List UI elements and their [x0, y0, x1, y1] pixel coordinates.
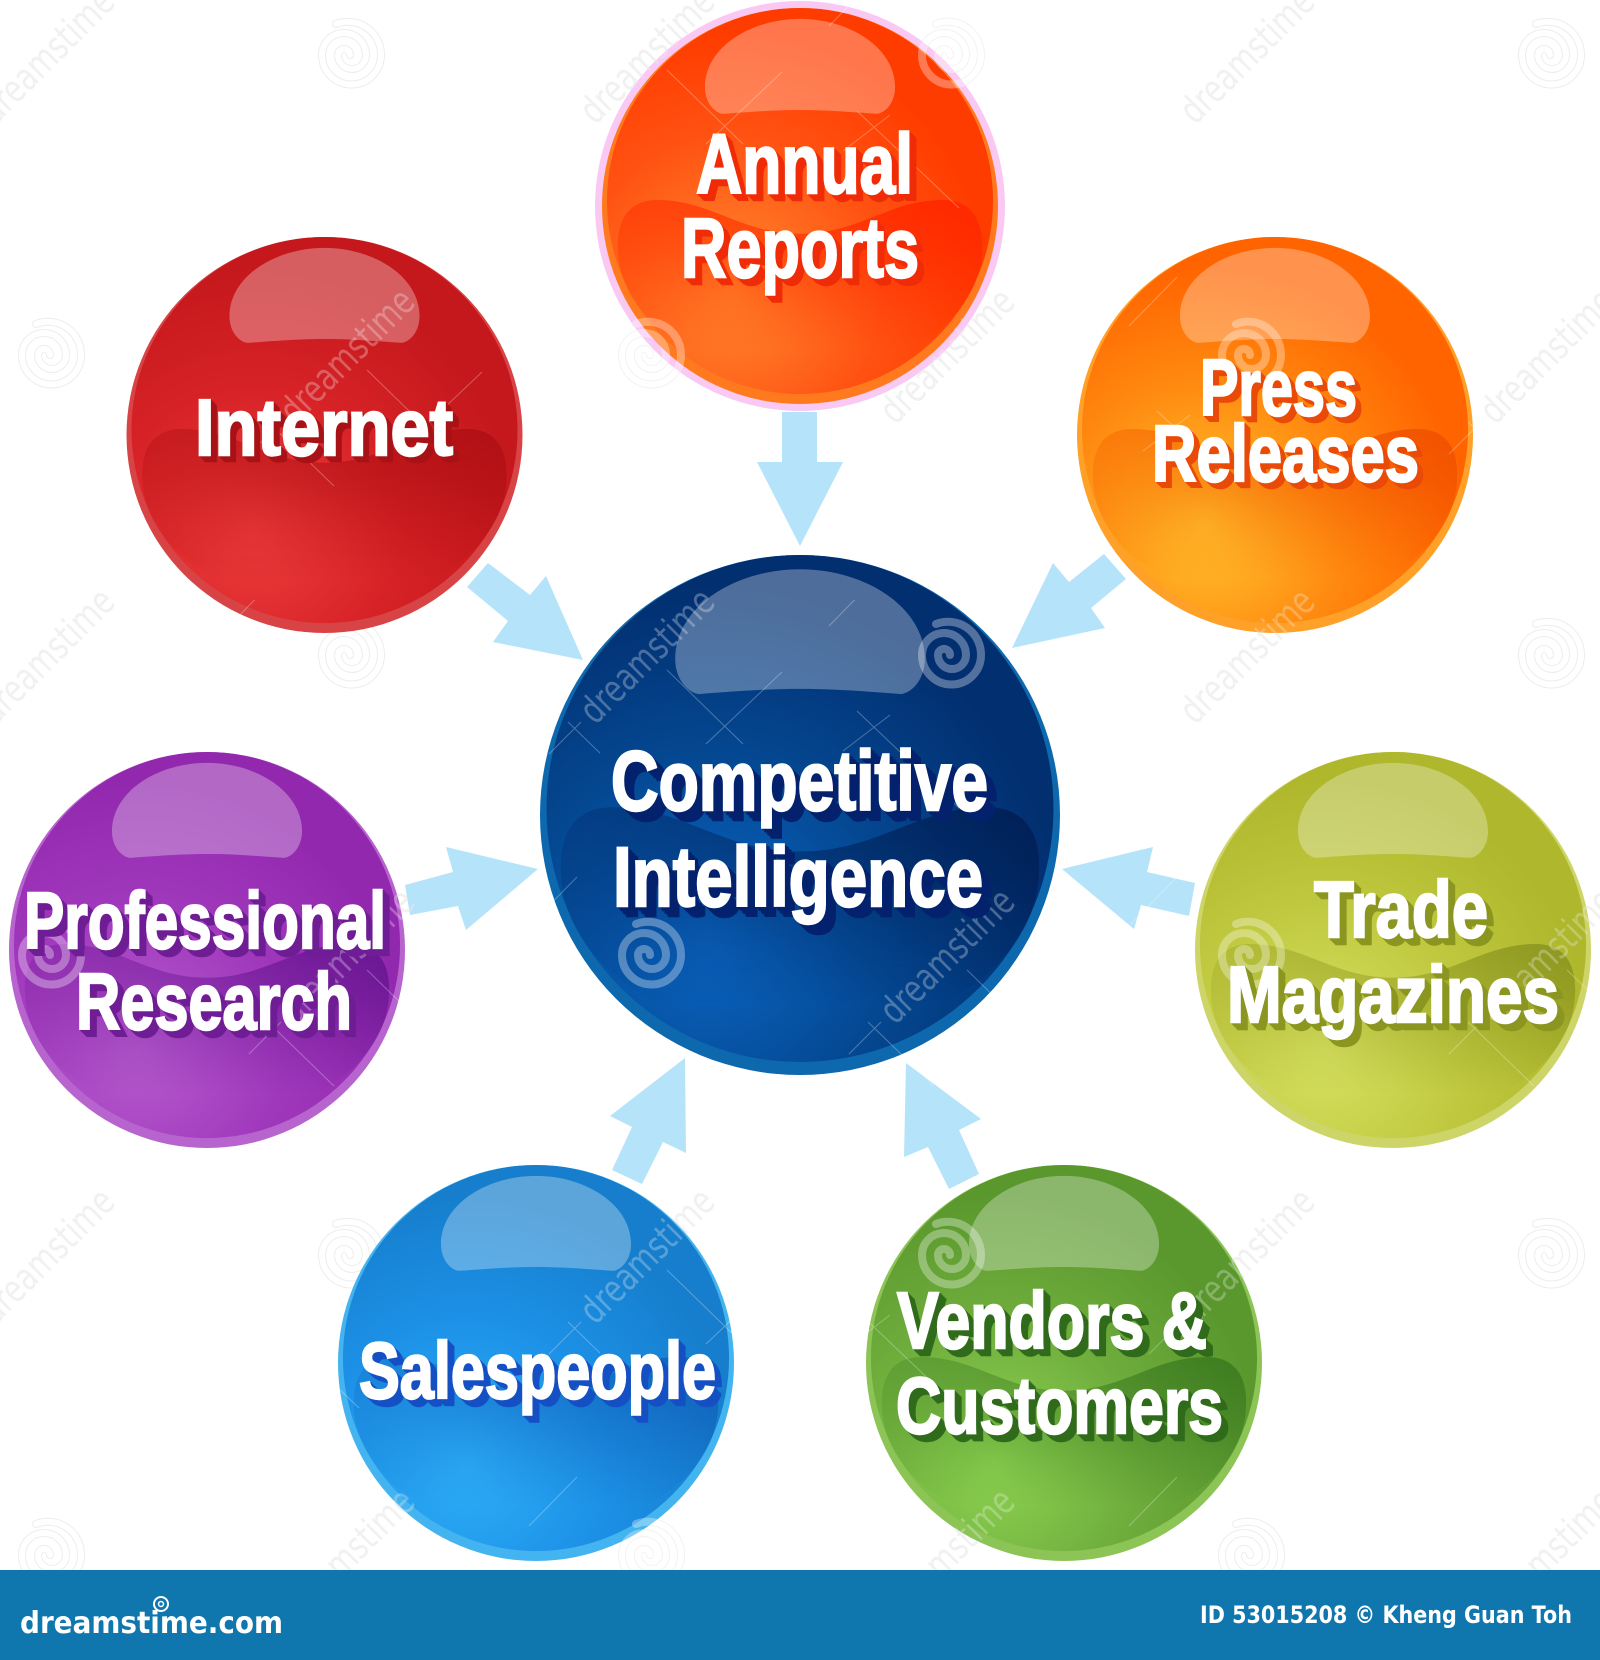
circle: press releases — [1077, 237, 1473, 633]
watermark spirals over circles — [22, 22, 1281, 1584]
label: Professional Research: Research — [76, 957, 352, 1046]
label: Competitive Intelligence — [611, 734, 988, 924]
footer logo: dreamstime.com — [20, 1606, 283, 1641]
circle: competitive intelligence centre — [540, 555, 1060, 1075]
circle: professional research — [9, 752, 405, 1148]
watermark text on background: dreamstime — [270, 279, 423, 432]
label: Trade Magazines: Trade — [1314, 865, 1488, 954]
watermark text on background: dreamstime — [870, 279, 1023, 432]
watermark text on background: dreamstime — [870, 879, 1023, 1032]
label: Salespeople: Salespeople — [359, 1326, 716, 1415]
circle: annual reports — [595, 1, 1005, 411]
label: Competitive Intelligence: Competitive — [611, 734, 988, 828]
label: Professional Research: Professional — [24, 876, 386, 965]
watermark text on background: dreamstime — [1170, 1179, 1323, 1332]
label: Trade Magazines — [1227, 865, 1559, 1039]
label: Vendors & Customers: Customers — [896, 1361, 1223, 1450]
label: Press Releases: Press — [1200, 343, 1357, 432]
watermark text on background: dreamstime — [870, 1479, 1023, 1632]
arrow: internet to centre — [467, 563, 583, 660]
label: Competitive Intelligence: Intelligence — [613, 830, 983, 924]
arrow: salespeople to centre — [610, 1058, 686, 1184]
arrow: vendors and customers to centre — [904, 1063, 981, 1189]
footer bar — [0, 1570, 1600, 1660]
arrow: press releases to centre — [1012, 554, 1126, 648]
circle: vendors and customers — [866, 1165, 1262, 1561]
watermark text on background: dreamstime — [270, 879, 423, 1032]
label: Press Releases — [1152, 343, 1419, 498]
label: Annual Reports: Annual — [696, 117, 913, 211]
label: Annual Reports: Reports — [681, 201, 919, 295]
label: Annual Reports — [681, 117, 919, 295]
circle: internet — [126, 237, 522, 633]
label: Vendors & Customers — [896, 1276, 1223, 1450]
watermark text on background: dreamstime — [570, 1179, 723, 1332]
circle: salespeople — [338, 1165, 734, 1561]
watermark text on background: dreamstime — [270, 1479, 423, 1632]
arrow: annual reports to centre — [757, 412, 843, 546]
label: Vendors & Customers: Vendors & — [897, 1276, 1207, 1365]
circle: trade magazines — [1195, 752, 1591, 1148]
watermark text on background: dreamstime — [570, 579, 723, 732]
label: Press Releases: Releases — [1152, 409, 1419, 498]
arrow: professional research to centre — [405, 847, 538, 930]
label: Professional Research — [24, 876, 386, 1046]
arrow: trade magazines to centre — [1062, 847, 1195, 929]
watermark text on background: dreamstime — [1170, 579, 1323, 732]
label: Internet: Internet — [195, 383, 453, 472]
